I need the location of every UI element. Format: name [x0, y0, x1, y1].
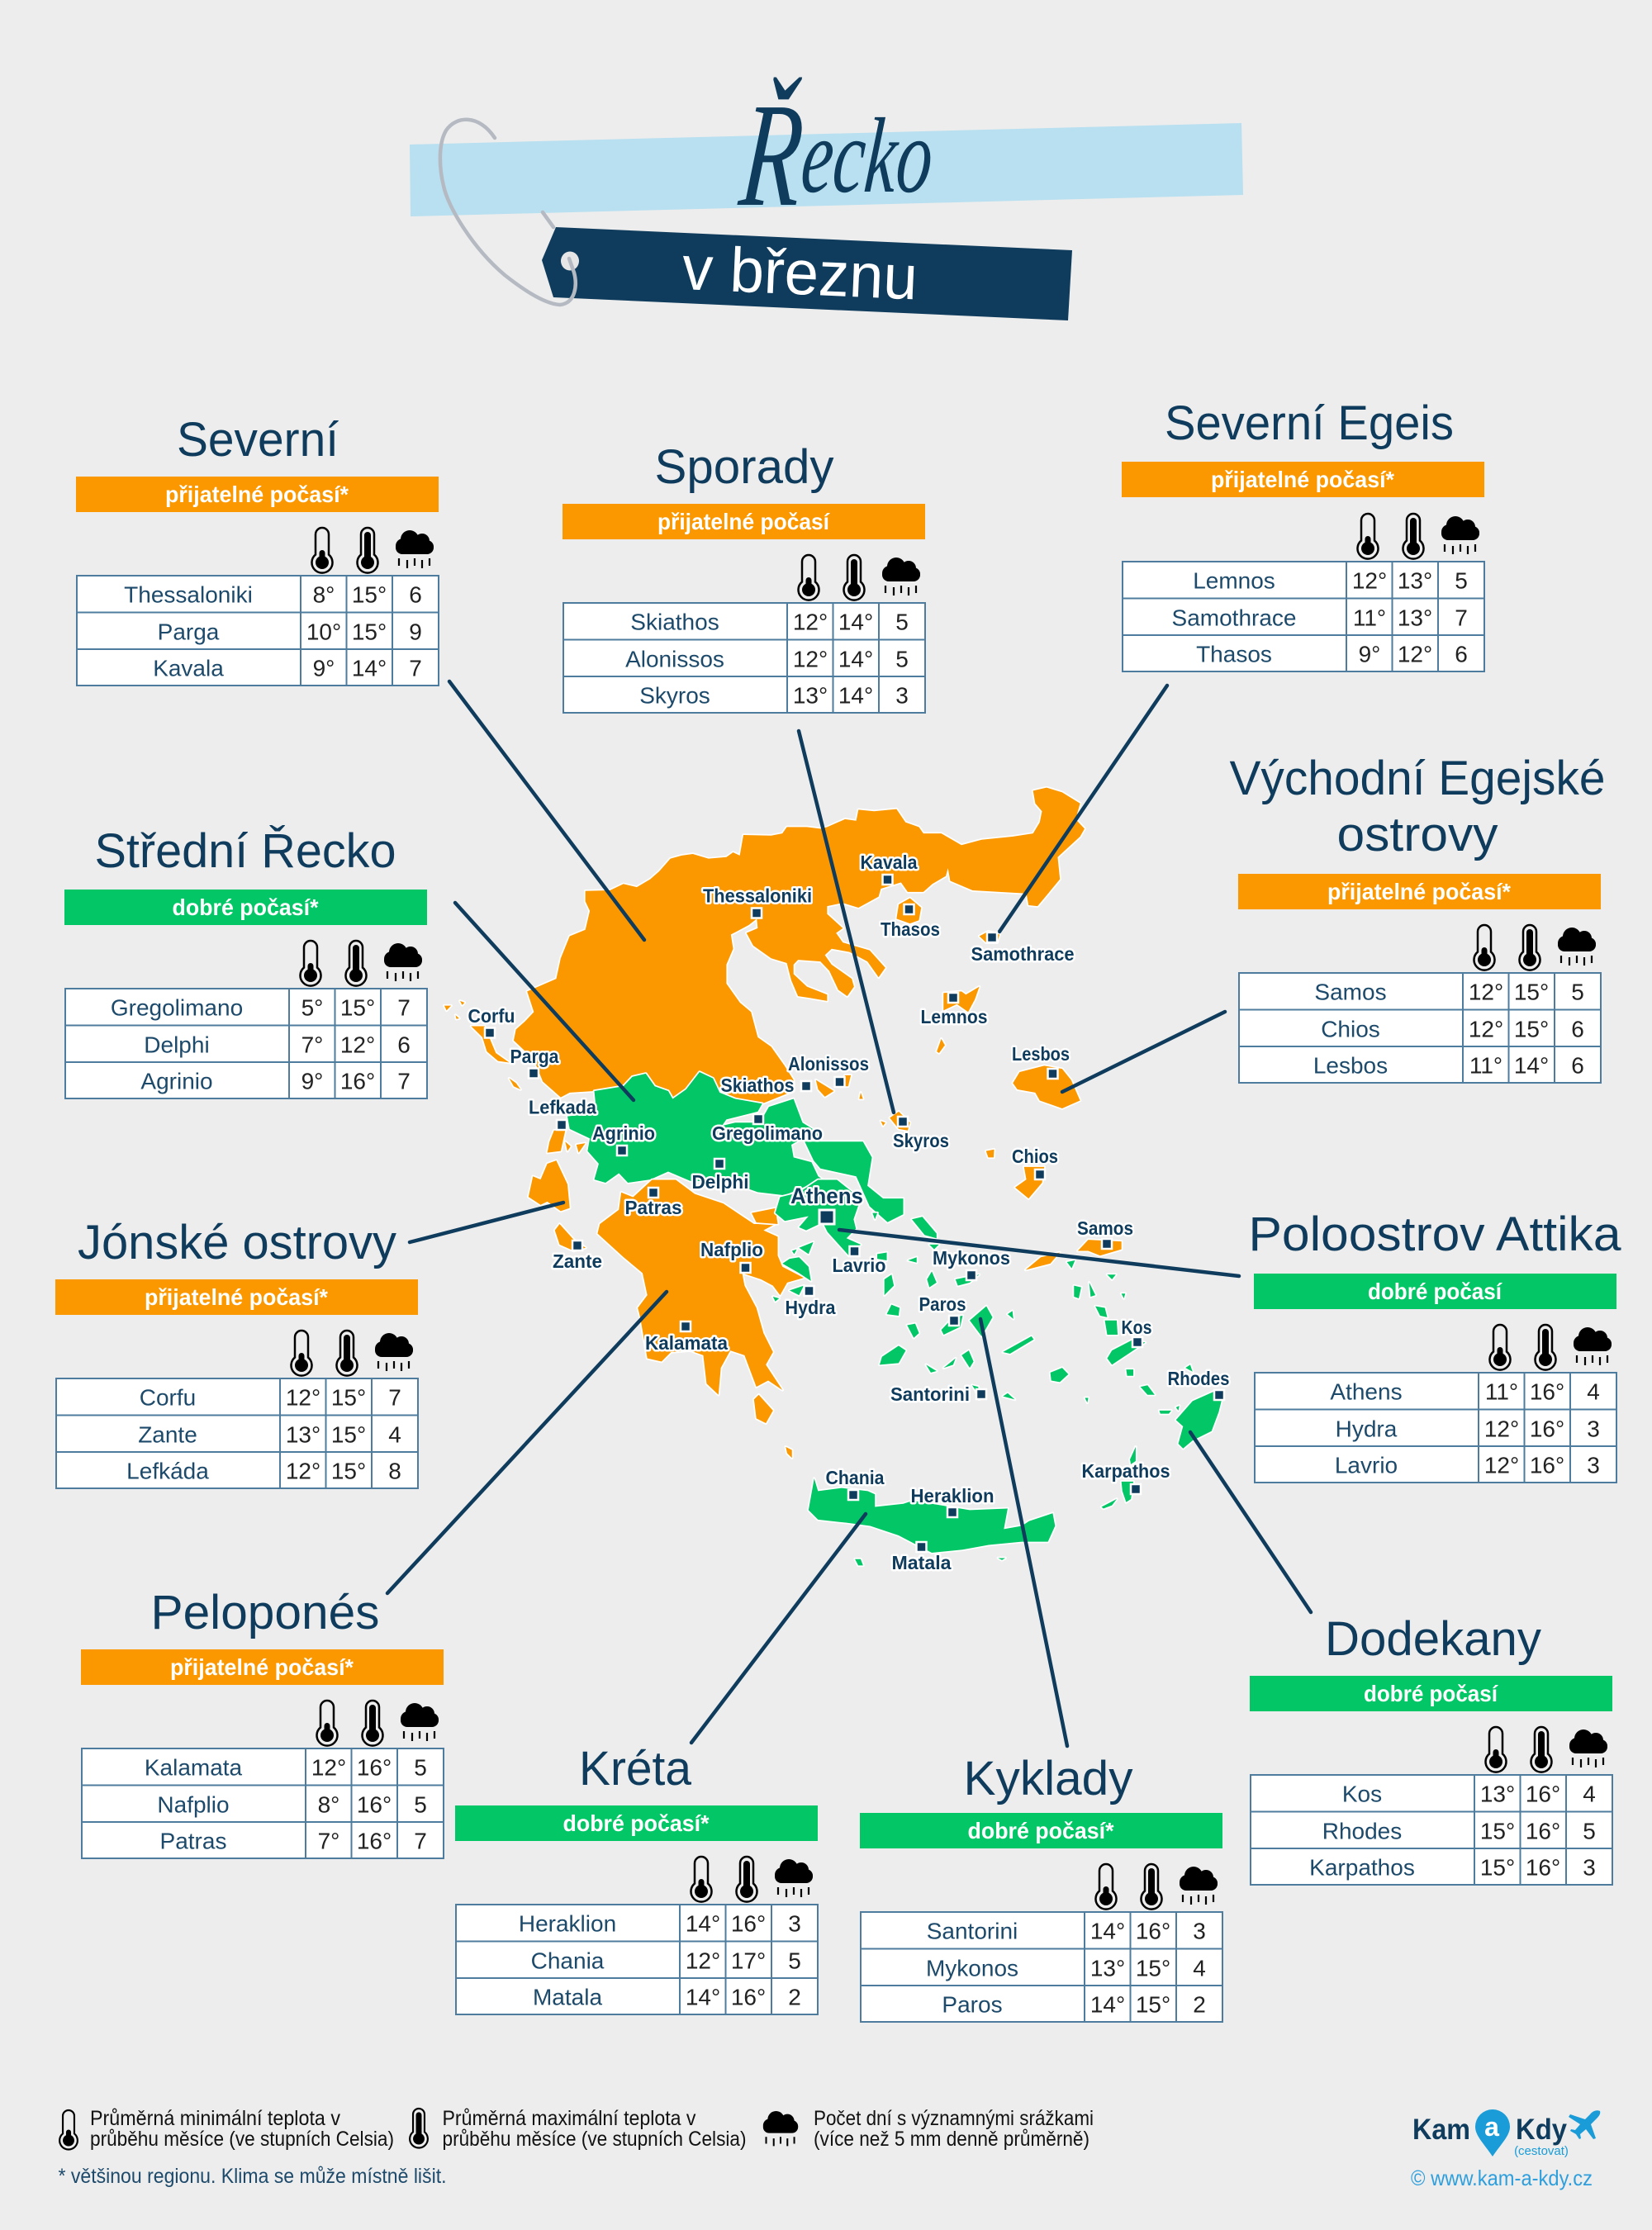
city labels: Skyros	[893, 1130, 949, 1151]
city markers	[485, 875, 1224, 1552]
table values: 16°	[357, 1792, 392, 1817]
table values: 15°	[331, 1422, 366, 1447]
table values	[145, 1754, 427, 1853]
orange regions (north map part)	[444, 788, 1085, 1211]
icon: plane	[1569, 2110, 1600, 2139]
city labels: Patras	[624, 1197, 682, 1218]
table values: 4	[1583, 1781, 1596, 1807]
weather banner	[55, 1279, 418, 1315]
table values: 2	[1193, 1992, 1206, 2017]
city labels: Rhodes	[1168, 1368, 1229, 1389]
table values: 16°	[1530, 1379, 1564, 1404]
table values	[625, 610, 909, 709]
weather banner	[76, 477, 439, 512]
city labels: Skiathos	[720, 1075, 795, 1096]
table values: Skiathos	[630, 610, 719, 634]
city labels: Kalamata	[645, 1332, 728, 1354]
table values: 8°	[318, 1792, 339, 1817]
table values: Samos	[1314, 980, 1387, 1004]
table values: Hydra	[1336, 1416, 1398, 1442]
table values: 15°	[1480, 1855, 1515, 1880]
table values: Mykonos	[926, 1956, 1018, 1981]
table values	[1313, 980, 1584, 1079]
city labels: Paros	[919, 1293, 966, 1315]
table values: 16°	[1530, 1452, 1564, 1478]
banner text: dobré počasí*	[563, 1810, 710, 1836]
table values: 16°	[1530, 1416, 1564, 1442]
column icons	[691, 1857, 813, 1902]
heading: Východní Egejské: Východní Egejské	[1229, 752, 1606, 805]
table values: 16°	[731, 1911, 766, 1936]
banner text: přijatelné počasí*	[1211, 467, 1394, 492]
table grid	[77, 576, 439, 686]
weather banner	[455, 1805, 818, 1841]
heading: Jónské ostrovy: Jónské ostrovy	[78, 1216, 396, 1269]
weather banner	[1250, 1676, 1612, 1711]
table values: Agrinio	[140, 1069, 213, 1094]
table values: 15°	[352, 619, 387, 644]
legend text: maximum: Průměrná maximální teplota v	[443, 2107, 696, 2130]
table values: 15°	[1514, 1016, 1549, 1042]
legend text: rain: (více než 5 mm denně průměrně)	[814, 2128, 1089, 2151]
logo: Kam a Kdy	[1411, 2109, 1600, 2190]
city labels: Gregolimano	[712, 1122, 823, 1144]
subheading: v březnu: v březnu	[681, 233, 919, 313]
icon: map pin	[1475, 2109, 1510, 2156]
table values: Thessaloniki	[124, 581, 253, 608]
panel: Poloostrov Attika	[1249, 1208, 1621, 1483]
table values: Kalamata	[145, 1754, 243, 1781]
table grid	[861, 1912, 1222, 2022]
table grid	[56, 1378, 418, 1488]
table values	[126, 1384, 401, 1483]
legend text: minimum: Průměrná minimální teplota v	[90, 2107, 340, 2130]
tagline: (cestovat)	[1514, 2144, 1569, 2158]
table values: 12°	[1398, 641, 1432, 667]
table values: 12°	[1484, 1416, 1519, 1442]
table values: Thasos	[1196, 641, 1272, 667]
table values: 13°	[1480, 1781, 1515, 1807]
panel: Kyklady	[860, 1752, 1222, 2022]
table values: 12°	[686, 1948, 720, 1974]
banner text: přijatelné počasí	[657, 509, 830, 534]
table values: Rhodes	[1322, 1819, 1402, 1843]
table values: Lefkáda	[126, 1459, 209, 1483]
legend text: rain: Počet dní s významnými srážkami	[814, 2107, 1094, 2130]
table values: 5	[788, 1948, 801, 1974]
table values	[1330, 1379, 1600, 1478]
table values: 15°	[1136, 1992, 1170, 2017]
panel: Kréta	[455, 1742, 818, 2014]
banner text: dobré počasí*	[968, 1818, 1114, 1843]
table values: 11°	[1353, 605, 1386, 631]
city labels: Matala	[892, 1552, 952, 1573]
table values: 16°	[357, 1829, 392, 1853]
table values: 5	[414, 1792, 427, 1817]
table values: 3	[788, 1911, 801, 1936]
south map part orange	[555, 1179, 1122, 1458]
heading: Řecko: Ř	[734, 73, 809, 238]
city labels: Agrinio	[592, 1122, 655, 1144]
table values: 16°	[731, 1984, 766, 2010]
table values: Zante	[138, 1422, 197, 1447]
city labels: Lemnos	[920, 1006, 988, 1027]
icon: maximum temperature thermometer	[410, 2109, 428, 2148]
heading: Kréta: Kréta	[579, 1742, 692, 1796]
table values: 12°	[286, 1459, 320, 1483]
heading: Severní: Severní	[177, 413, 339, 467]
table values: Lavrio	[1335, 1452, 1398, 1478]
table values: 15°	[331, 1384, 366, 1411]
city labels: Nafplio	[700, 1239, 763, 1260]
city labels: Lefkada	[529, 1097, 596, 1118]
table values: Corfu	[140, 1384, 196, 1411]
city labels: Thasos	[881, 918, 940, 940]
table values: 13°	[1398, 605, 1432, 631]
legend	[59, 2107, 1094, 2151]
table values: 15°	[1514, 980, 1549, 1004]
table values: Chania	[531, 1948, 605, 1974]
table values: 5	[1571, 980, 1584, 1004]
table values: 6	[1571, 1052, 1584, 1079]
table values: 14°	[1090, 1992, 1125, 2017]
table values: Kavala	[153, 656, 224, 681]
footnote: * většinou regionu. Klima se může místně lišit.	[58, 2165, 446, 2188]
table values: 16°	[1136, 1918, 1170, 1944]
table values: 11°	[1469, 1052, 1502, 1079]
table values: 7	[397, 1069, 411, 1094]
table values: 12°	[1469, 1016, 1503, 1042]
column icons	[1474, 925, 1596, 970]
heading: Kyklady: Kyklady	[963, 1752, 1133, 1805]
city labels: Santorini	[890, 1383, 970, 1405]
city labels: Parga	[510, 1046, 559, 1067]
table values: 3	[1587, 1416, 1600, 1442]
weather banner	[563, 504, 925, 539]
legend text: minimum: průběhu měsíce (ve stupních Celsia)	[90, 2128, 394, 2151]
table values: 14°	[838, 646, 873, 672]
table values	[111, 994, 411, 1094]
wordmark: Kam: Kam	[1412, 2114, 1470, 2146]
city labels: Alonissos	[788, 1053, 869, 1075]
table values: 12°	[311, 1754, 346, 1781]
table values	[1172, 568, 1468, 667]
table values	[926, 1918, 1206, 2017]
column icons	[301, 941, 422, 986]
table values: 16°	[340, 1069, 375, 1094]
leader lines	[387, 681, 1311, 1746]
city labels: Athens	[790, 1184, 863, 1208]
city labels: Heraklion	[910, 1485, 995, 1506]
table values: Alonissos	[625, 646, 724, 672]
table values: 12°	[286, 1384, 320, 1411]
grey string	[440, 120, 576, 305]
table values: 7°	[301, 1032, 323, 1057]
city labels: Chania	[826, 1467, 885, 1488]
table values: 4	[1587, 1379, 1600, 1404]
legend text: maximum	[443, 2107, 747, 2151]
column icons	[1485, 1727, 1607, 1772]
city labels: Kos	[1122, 1317, 1151, 1338]
weather banner	[64, 890, 427, 925]
table values: 17°	[731, 1948, 766, 1974]
table values: 16°	[1526, 1855, 1560, 1880]
table values: Patras	[160, 1829, 226, 1853]
legend text: maximum: průběhu měsíce (ve stupních Celsia)	[443, 2128, 747, 2151]
city labels: Corfu	[468, 1005, 515, 1027]
panel: Severní Egeis	[1122, 396, 1484, 671]
table values: 10°	[306, 619, 341, 644]
table values: 13°	[793, 682, 828, 709]
table values: 9°	[301, 1069, 323, 1094]
panel: Střední Řecko	[64, 824, 427, 1098]
table values: 5	[1455, 568, 1468, 593]
table values: 13°	[1398, 568, 1432, 593]
table values: 6	[1571, 1016, 1584, 1042]
city labels: Karpathos	[1082, 1460, 1170, 1482]
table values: Gregolimano	[111, 994, 243, 1021]
panel: Východní Egejské ostrovy	[1229, 752, 1606, 1083]
table values: 7	[1455, 605, 1468, 631]
table values: 16°	[1526, 1781, 1560, 1807]
table grid	[1251, 1775, 1612, 1885]
table values: Karpathos	[1309, 1855, 1415, 1880]
table values: 9°	[313, 656, 335, 681]
table values: 5	[1583, 1819, 1596, 1843]
table values: 6	[397, 1032, 411, 1057]
city labels: Zante	[553, 1250, 602, 1272]
table values: 7	[397, 994, 411, 1021]
city labels: Samothrace	[971, 943, 1074, 965]
map of Greece	[444, 788, 1223, 1565]
table values: 3	[1587, 1452, 1600, 1478]
table values: 14°	[1090, 1918, 1125, 1944]
table values	[124, 581, 422, 681]
table values: 5	[895, 610, 909, 634]
table values	[519, 1911, 801, 2010]
table values: Samothrace	[1172, 605, 1296, 631]
heading: Severní Egeis: Severní Egeis	[1165, 396, 1454, 450]
column icons	[317, 1701, 439, 1746]
table grid	[82, 1748, 444, 1858]
column icons	[1490, 1325, 1612, 1370]
table values: Matala	[533, 1984, 602, 2010]
heading: ostrovy: ostrovy	[1336, 808, 1498, 861]
table values: 12°	[793, 646, 828, 672]
weather banner	[81, 1649, 444, 1685]
table values: Heraklion	[519, 1911, 616, 1936]
pin letter: a	[1484, 2112, 1499, 2142]
table grid	[456, 1905, 818, 2014]
table values: Athens	[1330, 1379, 1403, 1404]
panel: Severní	[76, 413, 439, 686]
heading: Řecko: ecko	[797, 96, 938, 215]
table grid	[563, 603, 925, 713]
column icons	[1358, 514, 1479, 559]
city labels: Lavrio	[833, 1255, 885, 1276]
weather banner	[1122, 462, 1484, 497]
table values: 6	[1455, 641, 1468, 667]
banner text: dobré počasí	[1368, 1279, 1502, 1304]
table values: 14°	[1514, 1052, 1549, 1079]
table values: 7°	[318, 1829, 339, 1853]
table values: 12°	[1352, 568, 1387, 593]
table values: Nafplio	[157, 1792, 230, 1817]
table values	[1309, 1781, 1596, 1880]
table values: Lemnos	[1193, 568, 1275, 593]
table values: 14°	[838, 610, 873, 634]
green regions (central Greece)	[567, 1072, 903, 1222]
heading: Dodekany: Dodekany	[1325, 1612, 1541, 1666]
table values: 16°	[357, 1754, 392, 1781]
table values: 12°	[1469, 980, 1503, 1004]
city labels: Lesbos	[1012, 1043, 1070, 1065]
light blue band	[410, 123, 1243, 216]
table values: 7	[409, 656, 422, 681]
heading: Poloostrov Attika: Poloostrov Attika	[1249, 1208, 1621, 1261]
panel: Jónské ostrovy	[55, 1216, 418, 1488]
table values: Parga	[158, 619, 220, 644]
column icons	[312, 528, 434, 573]
column icons	[291, 1331, 413, 1376]
title banner	[410, 73, 1243, 320]
table values: 15°	[340, 994, 375, 1021]
banner text: přijatelné počasí*	[170, 1654, 354, 1680]
panel: Sporady	[563, 440, 925, 713]
website: © www.kam-a-kdy.cz	[1411, 2166, 1593, 2190]
table values: 12°	[793, 610, 828, 634]
table values: 13°	[286, 1422, 320, 1447]
column icons	[1095, 1864, 1218, 1910]
table values: 14°	[838, 682, 873, 709]
table grid	[1255, 1373, 1616, 1483]
table values: 3	[1583, 1855, 1596, 1880]
table values: 15°	[1480, 1819, 1515, 1843]
banner text: dobré počasí	[1364, 1681, 1498, 1706]
icon: rain cloud	[763, 2111, 798, 2146]
table values: 3	[1193, 1918, 1206, 1944]
table values: Lesbos	[1313, 1052, 1388, 1079]
table values: 6	[409, 581, 422, 608]
legend text: minimum	[90, 2107, 394, 2151]
table values: 11°	[1485, 1379, 1518, 1404]
table values: 12°	[1484, 1452, 1519, 1478]
banner text: přijatelné počasí*	[1327, 879, 1511, 904]
table values: 15°	[352, 581, 387, 608]
icon: minimum temperature thermometer	[59, 2110, 78, 2150]
navy tag	[542, 227, 1072, 320]
legend text: rain	[814, 2107, 1094, 2151]
heading: Peloponés: Peloponés	[150, 1586, 380, 1639]
table values: 16°	[1526, 1819, 1560, 1843]
table values: 9	[409, 619, 422, 644]
table grid	[65, 989, 427, 1098]
table values: Skyros	[639, 682, 710, 709]
table values: 7	[414, 1829, 427, 1853]
weather banner	[860, 1813, 1222, 1848]
banner text: přijatelné počasí*	[145, 1284, 328, 1310]
table values: 12°	[340, 1032, 375, 1057]
tag hole	[561, 251, 579, 271]
city labels: Thessaloniki	[703, 885, 812, 907]
heading: Sporady: Sporady	[654, 440, 834, 494]
table values: Chios	[1321, 1016, 1380, 1042]
south map part green	[773, 1179, 1223, 1565]
table values: Santorini	[927, 1918, 1018, 1944]
city labels: Mykonos	[933, 1247, 1010, 1269]
table values: 7	[388, 1384, 401, 1411]
table values: 15°	[1136, 1956, 1170, 1981]
city labels: Chios	[1012, 1146, 1058, 1167]
table values: 3	[895, 682, 909, 709]
city labels: Kavala	[861, 852, 918, 873]
table values: 5	[414, 1754, 427, 1781]
table values: 14°	[686, 1911, 720, 1936]
banner text: přijatelné počasí*	[165, 482, 349, 507]
table values: 4	[1193, 1956, 1206, 1981]
banner text: dobré počasí*	[172, 894, 319, 920]
city labels: Hydra	[785, 1297, 836, 1318]
table values: 2	[788, 1984, 801, 2010]
heading: Střední Řecko: Střední Řecko	[94, 824, 396, 878]
table values: 5	[895, 646, 909, 672]
weather banner	[1238, 874, 1601, 909]
city labels: Samos	[1077, 1217, 1133, 1239]
table values: 9°	[1359, 641, 1380, 667]
table values: 4	[388, 1422, 401, 1447]
table values: 8°	[313, 581, 335, 608]
city labels	[468, 852, 1229, 1573]
table values: Delphi	[144, 1032, 210, 1057]
weather banner	[1254, 1274, 1616, 1309]
wordmark: Kdy: Kdy	[1516, 2114, 1567, 2146]
table grid	[1239, 973, 1601, 1083]
table values: 13°	[1090, 1956, 1125, 1981]
table grid	[1123, 562, 1484, 671]
table values: Kos	[1342, 1781, 1382, 1807]
table values: Paros	[942, 1992, 1003, 2017]
table values: 14°	[686, 1984, 720, 2010]
column icons	[798, 555, 920, 600]
table values: 5°	[301, 994, 323, 1021]
table values: 8	[388, 1459, 401, 1483]
table values: 15°	[331, 1459, 366, 1483]
panel: Dodekany	[1250, 1612, 1612, 1885]
panel: Peloponés	[81, 1586, 444, 1858]
table values: 14°	[352, 656, 387, 681]
city labels: Delphi	[692, 1171, 748, 1193]
